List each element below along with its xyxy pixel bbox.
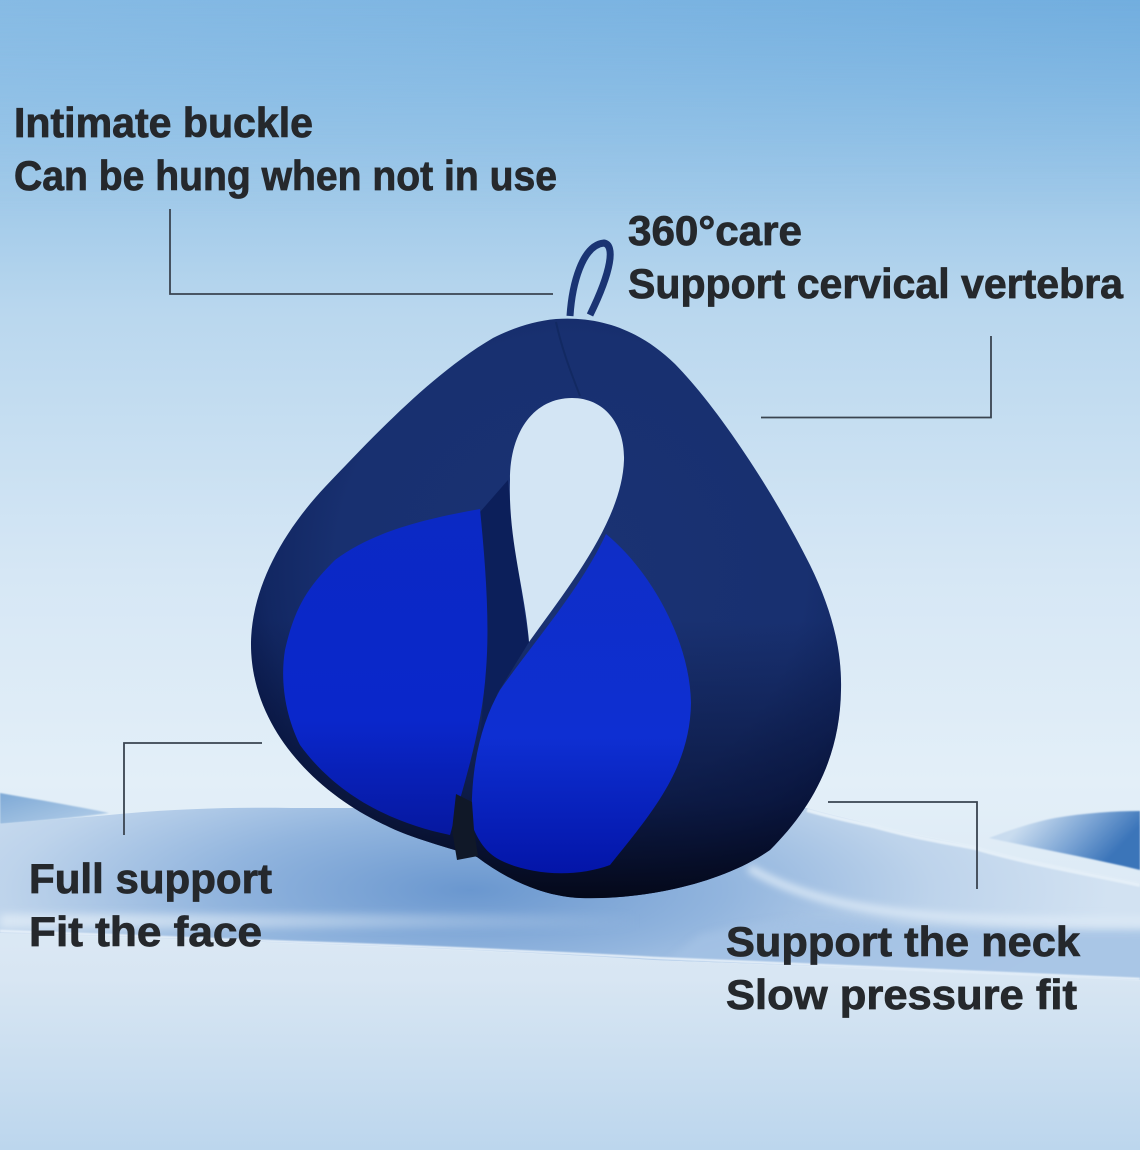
- pillow seam: [556, 322, 580, 396]
- callout: intimate buckle: Intimate buckle: [14, 99, 313, 146]
- left bright panel: [283, 509, 487, 835]
- callout: support the neck: [726, 802, 1081, 1018]
- zipper: [452, 794, 478, 860]
- pillow body: [251, 319, 841, 898]
- pillow hole: [510, 398, 624, 642]
- callout: 360 care: 360°care: [628, 207, 802, 254]
- right bright panel: [472, 534, 691, 873]
- callout: full support: Fit the face: [29, 908, 262, 955]
- icon: hanging loop: [570, 243, 610, 316]
- callout: support the neck: Slow pressure fit: [726, 971, 1077, 1018]
- centre ridge: [478, 480, 529, 770]
- pillow bottom shading: [252, 655, 841, 898]
- callout: intimate buckle: [14, 99, 557, 294]
- callout: intimate buckle: Can be hung when not in use: [14, 152, 557, 199]
- neck pillow: [240, 319, 850, 905]
- callout: full support: Full support: [29, 855, 272, 902]
- callout: full support: [29, 743, 272, 955]
- callout: 360 care: Support cervical vertebra: [628, 260, 1124, 307]
- callout: 360 care: [628, 207, 1124, 418]
- callout: support the neck: Support the neck: [726, 918, 1081, 965]
